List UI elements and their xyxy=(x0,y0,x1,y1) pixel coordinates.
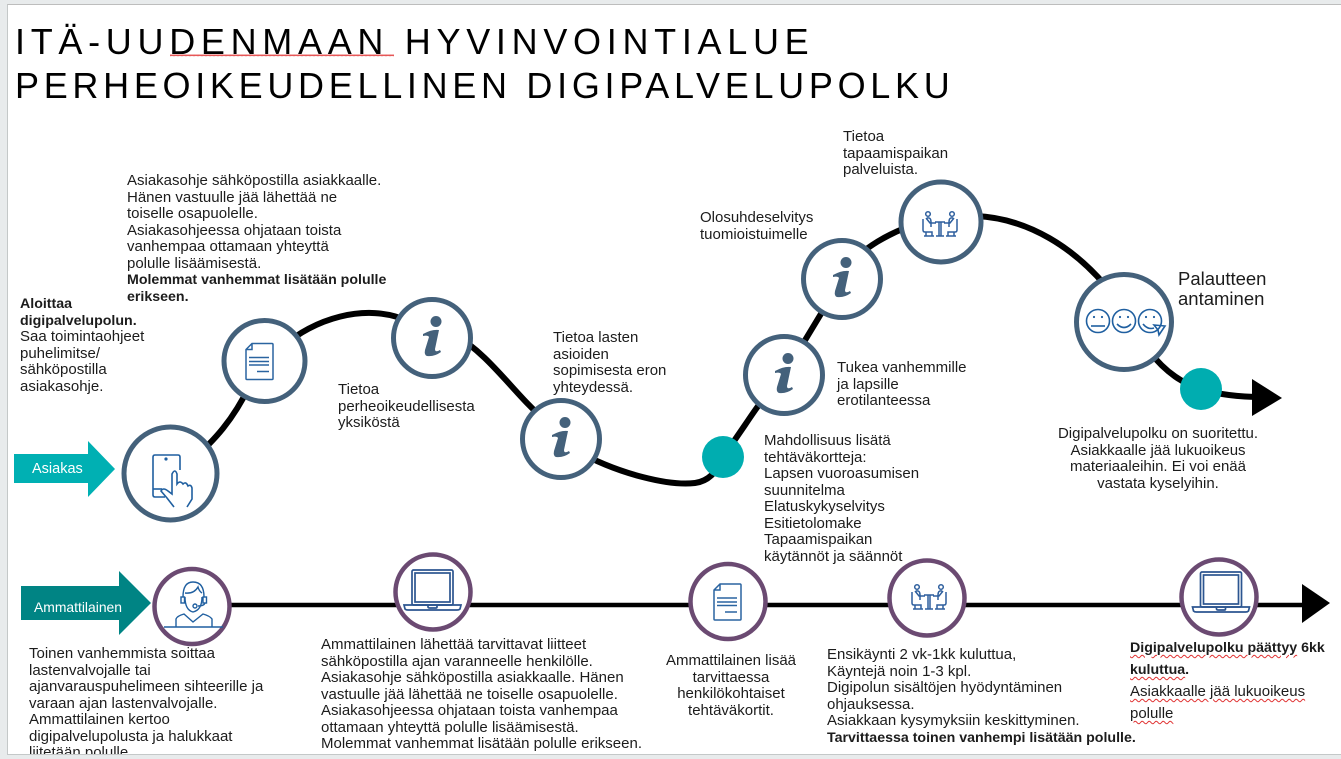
node: meeting icon xyxy=(890,560,964,636)
text: support for parents: erotilanteessa xyxy=(837,392,930,409)
text: path completed: materiaaleihin. Ei voi enää xyxy=(1070,458,1246,475)
text: client instructions: Asiakasohjeessa ohjataan toista xyxy=(127,222,341,239)
arrow: Asiakas xyxy=(14,441,115,497)
text: start of the path: digipalvelupolun. xyxy=(20,313,137,329)
text: attachments sent: Molemmat vanhemmat lisätään polulle erikseen. xyxy=(321,735,642,752)
text: personal task cards xyxy=(666,652,796,719)
text: personal task cards: tarvittaessa xyxy=(693,669,769,686)
text: separation info: asioiden xyxy=(553,346,609,363)
node: info xyxy=(804,240,880,318)
label: Ammattilainen: Ammattilainen xyxy=(34,599,122,615)
text: start of the path: asiakasohje. xyxy=(20,378,103,395)
text: separation info: sopimisesta eron xyxy=(553,362,666,379)
text: court report: tuomioistuimelle xyxy=(700,226,808,243)
end arrow: customer path xyxy=(1252,379,1282,416)
text: client instructions: polulle lisäämisestä. xyxy=(127,255,261,272)
text: attachments sent: Asiakasohjeessa ohjataan toista vanhempaa xyxy=(321,702,618,719)
text: start of the path: puhelimitse/ xyxy=(20,345,100,362)
text: path ends: polulle xyxy=(1130,705,1173,722)
text: attachments sent: Ammattilainen lähettää tarvittavat liitteet xyxy=(321,636,586,653)
node: document icon xyxy=(224,320,305,402)
text: client instructions: Hänen vastuulle jää lähettää ne xyxy=(127,189,337,206)
text: court report: Olosuhdeselvitys xyxy=(700,209,813,226)
text: attachments sent: ottamaan yhteyttä polulle lisäämisestä. xyxy=(321,719,579,736)
text: personal task cards: henkilökohtaiset xyxy=(677,685,785,702)
text: task cards: Lapsen vuoroasumisen xyxy=(764,465,919,482)
text: path ends: kuluttua. xyxy=(1130,662,1189,678)
text: personal task cards: tehtäväkortit. xyxy=(688,702,774,719)
text: client instructions: erikseen. xyxy=(127,289,189,305)
customer journey path xyxy=(190,216,1262,483)
text: path completed: vastata kyselyihin. xyxy=(1097,475,1219,492)
text: family law unit info: yksiköstä xyxy=(338,414,400,431)
text: client instructions: toiselle osapuolelle. xyxy=(127,205,258,222)
text: support for parents: Tukea vanhemmille xyxy=(837,359,966,376)
spell-check underline: title xyxy=(170,54,394,57)
text: support for parents xyxy=(836,359,966,409)
node: feedback smileys xyxy=(1076,274,1172,370)
text: first call xyxy=(29,645,264,755)
text: task cards: Tapaamispaikan xyxy=(764,531,872,548)
text: meeting place services: palveluista. xyxy=(843,161,918,178)
text: giving feedback: antaminen xyxy=(1178,288,1264,309)
text: start of the path xyxy=(20,296,144,395)
text: task cards: suunnitelma xyxy=(764,482,845,499)
text: first visit xyxy=(827,646,1136,746)
text: path completed: Asiakkaalle jää lukuoikeus xyxy=(1070,442,1246,459)
text: attachments sent xyxy=(321,636,642,752)
text: separation info: Tietoa lasten xyxy=(553,329,638,346)
text: family law unit info: perheoikeudellisesta xyxy=(338,398,475,415)
text: task cards: Mahdollisuus lisätä xyxy=(764,432,891,449)
text: task cards: Elatuskykyselvitys xyxy=(764,498,885,515)
teal milestone dot xyxy=(702,436,744,478)
text: task cards: Esitietolomake xyxy=(764,515,862,532)
node: meeting icon xyxy=(901,182,981,262)
text: giving feedback xyxy=(1178,268,1266,309)
title: ITÄ-UUDENMAAN HYVINVOINTIALUE xyxy=(15,20,814,62)
text: attachments sent: vastuulle jää lähettää ne toiselle osapuolelle. xyxy=(321,686,618,703)
text: court report xyxy=(700,209,813,243)
node: info xyxy=(746,336,822,414)
teal end dot xyxy=(1180,368,1222,410)
text: family law unit info: Tietoa xyxy=(338,381,379,398)
text: first visit: Digipolun sisältöjen hyödyntäminen xyxy=(827,679,1062,696)
text: path ends: Asiakkaalle jää lukuoikeus xyxy=(1130,683,1305,700)
node: laptop icon xyxy=(1182,560,1256,634)
subtitle: PERHEOIKEUDELLINEN DIGIPALVELUPOLKU xyxy=(15,64,954,106)
text: first call: ajanvarauspuhelimeen sihteerille ja xyxy=(29,678,263,695)
text: meeting place services xyxy=(843,128,948,178)
text: start of the path: Aloittaa xyxy=(20,296,72,312)
node: headset agent icon xyxy=(154,569,230,644)
text: client instructions: Molemmat vanhemmat lisätään polulle xyxy=(127,272,386,288)
text: first visit: Tarvittaessa toinen vanhempi lisätään polulle. xyxy=(827,730,1136,746)
text: meeting place services: Tietoa xyxy=(843,128,884,145)
text: giving feedback: Palautteen xyxy=(1178,268,1266,289)
arrow: Ammattilainen xyxy=(21,571,151,635)
end arrow: professional timeline xyxy=(1302,584,1330,623)
text: path ends xyxy=(1130,640,1325,724)
text: meeting place services: tapaamispaikan xyxy=(843,145,948,162)
text: client instructions xyxy=(127,172,386,305)
text: attachments sent: sähköpostilla ajan varanneelle henkilölle. xyxy=(321,653,593,670)
text: first call: Ammattilainen kertoo xyxy=(29,711,170,728)
text: first call: lastenvalvojalle tai xyxy=(29,662,151,679)
text: first call: varaan ajan lastenvalvojalle. xyxy=(29,695,217,712)
node: document icon xyxy=(690,564,766,639)
text: separation info: yhteydessä. xyxy=(553,379,633,396)
text: family law unit info xyxy=(338,381,475,431)
text: path completed xyxy=(1058,425,1258,492)
node: tablet touch icon xyxy=(124,427,217,520)
text: first call: digipalvelupolusta ja halukkaat xyxy=(29,728,232,745)
node: laptop icon xyxy=(396,554,470,630)
text: task cards: käytännöt ja säännöt xyxy=(764,548,902,565)
text: start of the path: sähköpostilla xyxy=(20,361,107,378)
node: info xyxy=(394,300,470,376)
text: separation info xyxy=(553,329,666,396)
text: first visit: Ensikäynti 2 vk-1kk kuluttua, xyxy=(827,646,1016,663)
text: client instructions: Asiakasohje sähköpostilla asiakkaalle. xyxy=(127,172,381,189)
label: Asiakas: Asiakas xyxy=(32,461,83,477)
text: first visit: Asiakkaan kysymyksiin keskittyminen. xyxy=(827,712,1080,729)
node: info xyxy=(522,400,600,478)
text: path ends: Digipalvelupolku päättyy 6kk xyxy=(1130,640,1325,656)
text: attachments sent: Asiakasohje sähköpostilla asiakkaalle. Hänen xyxy=(321,669,624,686)
text: personal task cards: Ammattilainen lisää xyxy=(666,652,796,669)
text: path completed: Digipalvelupolku on suoritettu. xyxy=(1058,425,1258,442)
text: task cards xyxy=(764,432,919,565)
text: support for parents: ja lapsille xyxy=(837,376,899,393)
text: task cards: tehtäväkortteja: xyxy=(764,449,867,466)
text: first visit: Käyntejä noin 1-3 kpl. xyxy=(827,663,971,680)
text: start of the path: Saa toimintaohjeet xyxy=(20,328,144,345)
text: client instructions: vanhempaa ottamaan yhteyttä xyxy=(127,238,329,255)
professional timeline line xyxy=(192,603,1305,607)
text: first call: Toinen vanhemmista soittaa xyxy=(29,645,215,662)
text: first visit: ohjauksessa. xyxy=(827,696,915,713)
